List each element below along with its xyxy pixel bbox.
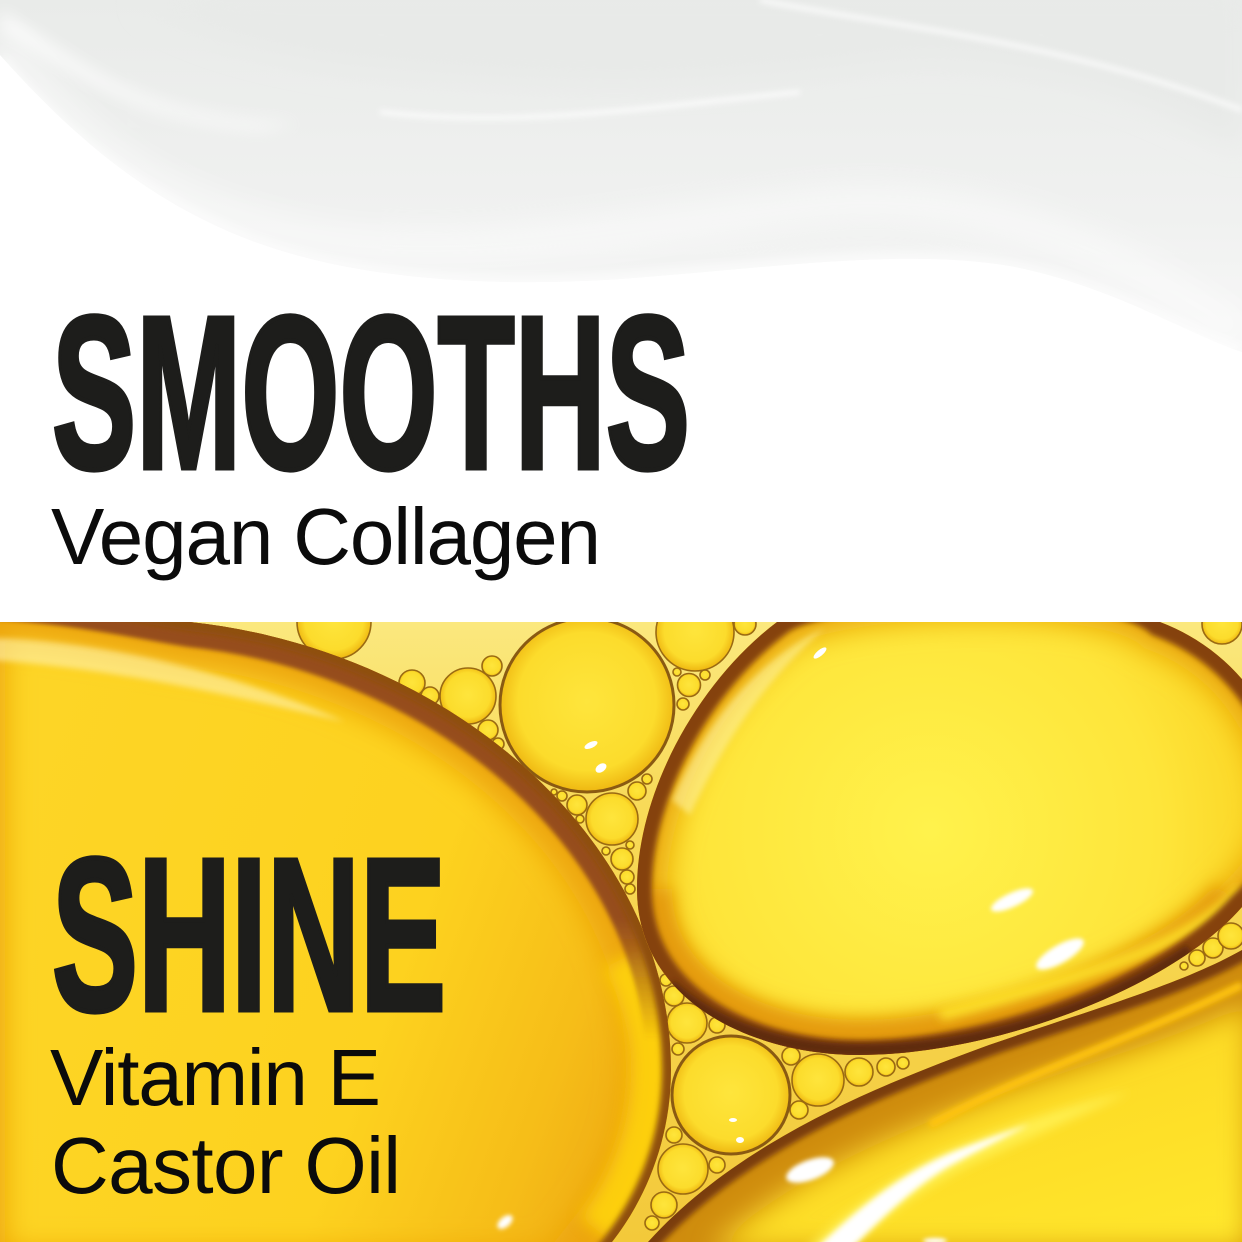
subheading: Vegan Collagen: Vegan Collagen	[51, 492, 601, 581]
image: cream swirl	[0, 0, 1242, 313]
image: small oil bubbles	[297, 585, 1242, 1230]
image: upper right oil drop	[637, 622, 1242, 1055]
image: medium oil bubbles	[500, 618, 790, 1154]
text: Castor Oil: Castor Oil	[51, 1121, 401, 1210]
panel: smooths (white cream)	[0, 0, 1242, 621]
image: large left oil drop	[0, 590, 680, 1242]
heading: SHINE: SHINE	[52, 814, 446, 1057]
panel: shine (golden oil)	[0, 570, 1242, 1242]
image: lower right oil drop	[648, 950, 1242, 1242]
heading: SMOOTHS: SMOOTHS	[52, 272, 690, 515]
text: Vitamin E: Vitamin E	[50, 1033, 381, 1122]
